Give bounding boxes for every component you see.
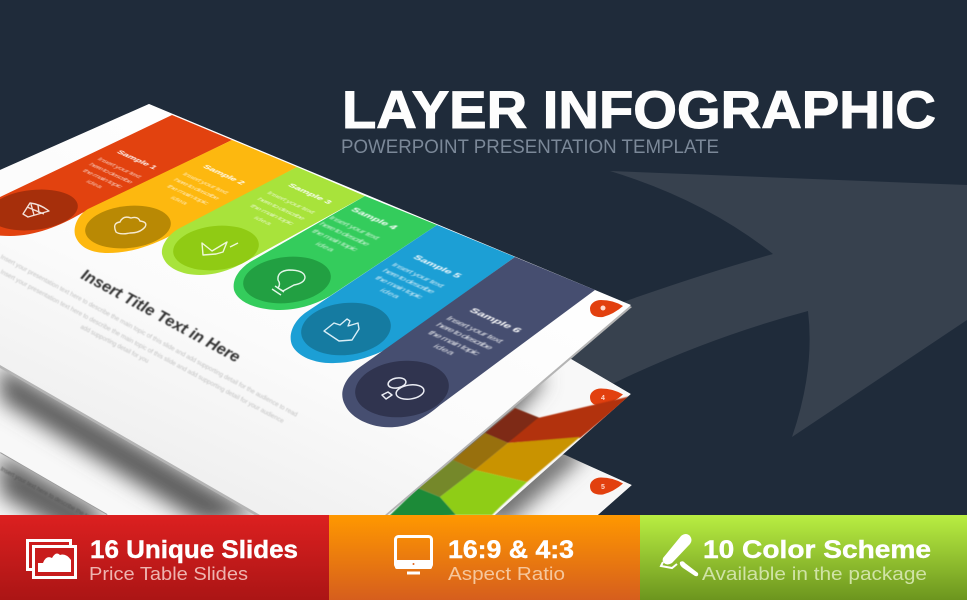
slide body text: Insert your presentation text here to describe the main topic of this slide and add supporting detail for the audience to read: [0, 254, 299, 419]
band 4 green: [234, 196, 437, 310]
heading: 10 color scheme: 10 Color Scheme: [703, 536, 931, 564]
slide 3 badge: 5: [601, 484, 605, 491]
icon: monitor: [395, 536, 432, 574]
icon: paint roller: [661, 534, 698, 576]
band 4 text: [298, 204, 400, 260]
icon: cloud heart: [115, 217, 146, 234]
icon: thumbs up: [324, 319, 359, 341]
slide 2 badge: 4: [601, 395, 605, 402]
subtitle: POWERPOINT PRESENTATION TEMPLATE: [341, 137, 719, 158]
icon: binoculars: [382, 377, 425, 401]
band 1 red: [0, 115, 232, 236]
band 1 text: the main topic: [81, 168, 125, 190]
icon: diamond: [23, 203, 49, 217]
band 1 text: Sample 1: [115, 149, 159, 171]
band 4 text: idea: [313, 241, 337, 253]
slide 3 small text: Insert your text here to describe the topic: [0, 467, 97, 524]
band 4 text: here to describe: [317, 221, 373, 247]
band 1 text: [70, 147, 159, 196]
panel: unique slides: [0, 515, 329, 600]
band 6 text: Insert your text: [443, 315, 506, 345]
band 2 text: Sample 2: [201, 163, 248, 186]
slide 1 (top layer): [0, 104, 632, 517]
band 5 text: here to describe: [380, 268, 437, 295]
band 3 text: idea: [252, 215, 275, 226]
band 3 text: Insert your text: [265, 190, 318, 215]
title: LAYER INFOGRAPHIC: [342, 81, 936, 140]
band 6 text: Sample 6: [466, 307, 524, 334]
band 5 text: Insert your text: [389, 262, 447, 289]
panel: aspect ratio: [329, 515, 640, 600]
panel: color scheme: [640, 515, 967, 600]
band 2 text: idea: [168, 195, 191, 206]
band 3 lime: [162, 167, 365, 275]
band 1 text: Insert your text: [96, 156, 144, 179]
slide 3 badge: [590, 478, 623, 495]
slide 2 folded chart: [385, 396, 631, 520]
icon: slides picture: [28, 540, 76, 578]
band 4 text: Sample 4: [348, 207, 400, 231]
band 6 text: [413, 304, 524, 365]
band 5 text: the main topic: [373, 275, 426, 300]
icon: light bulb: [272, 270, 305, 295]
band 4 text: the main topic: [310, 228, 360, 253]
slide 1 face: [0, 104, 631, 515]
slide 3 (bottom layer): [0, 453, 632, 515]
band 4 text: Insert your text: [327, 215, 383, 241]
band 6 text: idea: [431, 343, 458, 357]
band 3 text: [237, 180, 334, 233]
band 5 text: idea: [378, 287, 402, 300]
band 3 text: Sample 3: [286, 182, 334, 205]
icon: bow tie: [202, 242, 238, 255]
slide 2 (middle layer): [0, 359, 631, 515]
caption: price table slides: Price Table Slides: [89, 563, 248, 584]
band 3 text: the main topic: [248, 203, 296, 226]
band 5 blue: [291, 225, 515, 363]
band 6 text: here to describe: [433, 322, 495, 351]
band 2 yellow: [75, 140, 297, 253]
slide title: Insert Title Text in Here: [78, 267, 243, 367]
band 2 text: here to describe: [172, 177, 222, 201]
caption: available in the package: Available in the package: [702, 563, 927, 584]
band 6 navy: [342, 257, 595, 427]
band 6 text: the main topic: [425, 330, 483, 357]
slide 2 badge: [590, 388, 623, 406]
band 1 text: here to describe: [87, 162, 135, 185]
slide body text: add supporting detail for you: [79, 324, 150, 365]
band 5 text: [361, 251, 464, 308]
band 2 text: the main topic: [165, 184, 211, 206]
background arrow: [560, 171, 967, 437]
heading: 16:9 and 4:3: 16:9 & 4:3: [448, 536, 574, 564]
caption: aspect ratio: Aspect Ratio: [448, 563, 565, 584]
band 2 text: Insert your text: [181, 171, 232, 196]
slide body text: Insert your presentation text here to describe the main topic of this slide and add supporting detail for your audience: [0, 269, 285, 425]
band 3 text: here to describe: [255, 196, 308, 221]
band 5 text: Sample 5: [410, 254, 464, 280]
band 1 text: idea: [84, 179, 106, 190]
slide 1 edge thickness: [0, 104, 632, 517]
heading: 16 unique slides: 16 Unique Slides: [90, 536, 298, 564]
slide 1 badge: [590, 300, 623, 317]
band 2 text: [154, 161, 248, 213]
